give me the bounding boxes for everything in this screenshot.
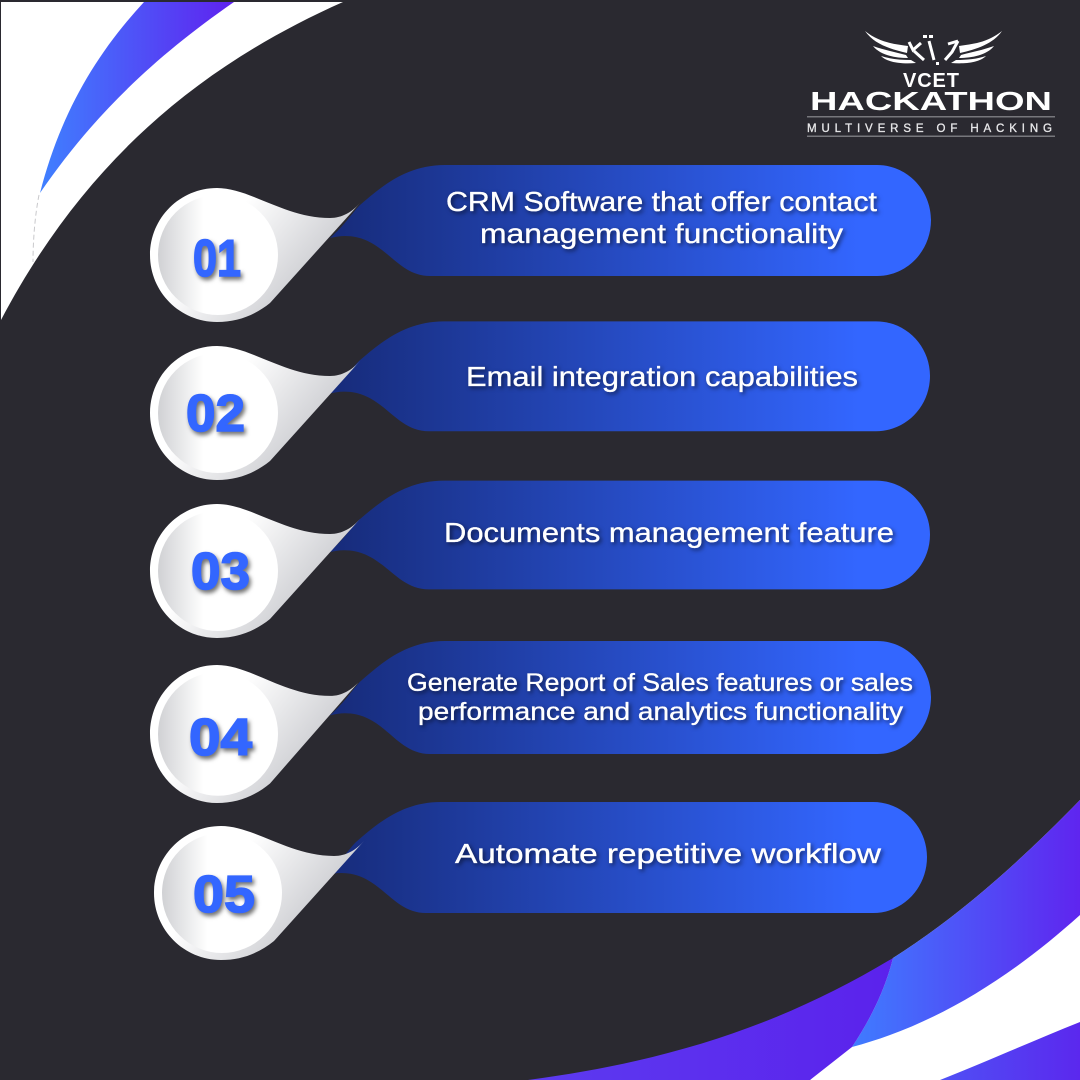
pill 3 — [329, 481, 930, 589]
item 2 — [150, 321, 930, 480]
icon: winged emblem — [865, 31, 1002, 65]
text 2: Email integration capabilities — [466, 361, 858, 392]
marker 3 — [150, 504, 360, 638]
text 1: CRM Software that offer contact — [446, 186, 877, 217]
logo text: VCET: VCET — [903, 70, 959, 92]
number 04: 04 — [189, 709, 252, 767]
text 3: Documents management feature — [444, 517, 894, 548]
text 4 — [407, 669, 913, 726]
logo text: tagline: MULTIVERSE OF HACKING — [807, 123, 1052, 135]
logo: VCET Hackathon — [807, 31, 1055, 137]
number 05: 05 — [193, 866, 255, 924]
marker 1 — [150, 188, 360, 322]
pill 4 — [330, 641, 931, 754]
item 4 — [150, 641, 931, 803]
text 1 — [446, 186, 877, 249]
number 02: 02 — [186, 385, 245, 443]
decorative corner: top left swoosh — [1, 2, 343, 320]
text 4: performance and analytics functionality — [418, 698, 904, 726]
number 03: 03 — [191, 543, 250, 601]
pill 5 — [326, 802, 927, 913]
item 5 — [154, 802, 927, 960]
text 1: management functionality — [480, 218, 843, 249]
marker 2 — [150, 346, 360, 480]
decorative corner: bottom right swoosh — [528, 800, 1080, 1080]
text 4: Generate Report of Sales features or sales — [407, 669, 913, 697]
text 5: Automate repetitive workflow — [455, 838, 882, 869]
item 1 — [150, 165, 931, 322]
pill 1 — [330, 165, 931, 276]
logo text: HACKATHON: HACKATHON — [810, 86, 1052, 116]
pill 2 — [329, 321, 930, 431]
number 01: 01 — [193, 230, 241, 288]
marker 4 — [150, 665, 360, 803]
item 3 — [150, 481, 930, 638]
marker 5 — [154, 826, 364, 960]
